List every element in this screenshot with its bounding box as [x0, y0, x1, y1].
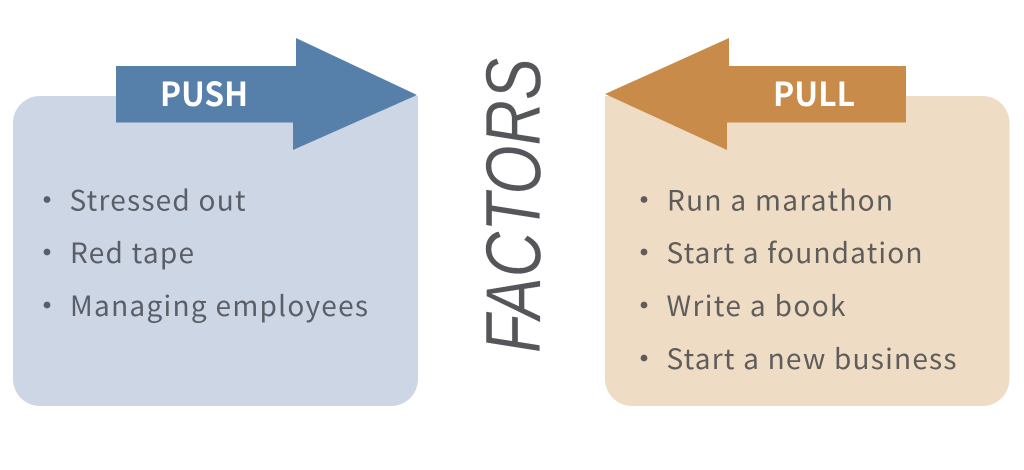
arrow: pull — [605, 38, 906, 150]
arrow: push — [116, 38, 417, 150]
pull panel background — [605, 96, 1010, 406]
pull item: run a marathon: Run a marathon — [667, 180, 893, 220]
push list — [44, 180, 368, 325]
pull item: start a foundation: Start a foundation — [666, 232, 922, 272]
pull item: start a new business: Start a new business — [666, 338, 956, 378]
push item: stressed out: Stressed out — [70, 180, 246, 220]
pull heading: PULL — [773, 68, 855, 116]
panel: pull factors — [605, 38, 1010, 406]
push panel background — [13, 96, 418, 406]
push item: managing employees: Managing employees — [70, 285, 368, 325]
push heading: PUSH — [160, 68, 248, 116]
pull list — [641, 180, 956, 378]
panel: push factors — [13, 38, 418, 406]
pull item: write a book: Write a book — [666, 285, 846, 325]
push item: red tape: Red tape — [70, 232, 194, 272]
